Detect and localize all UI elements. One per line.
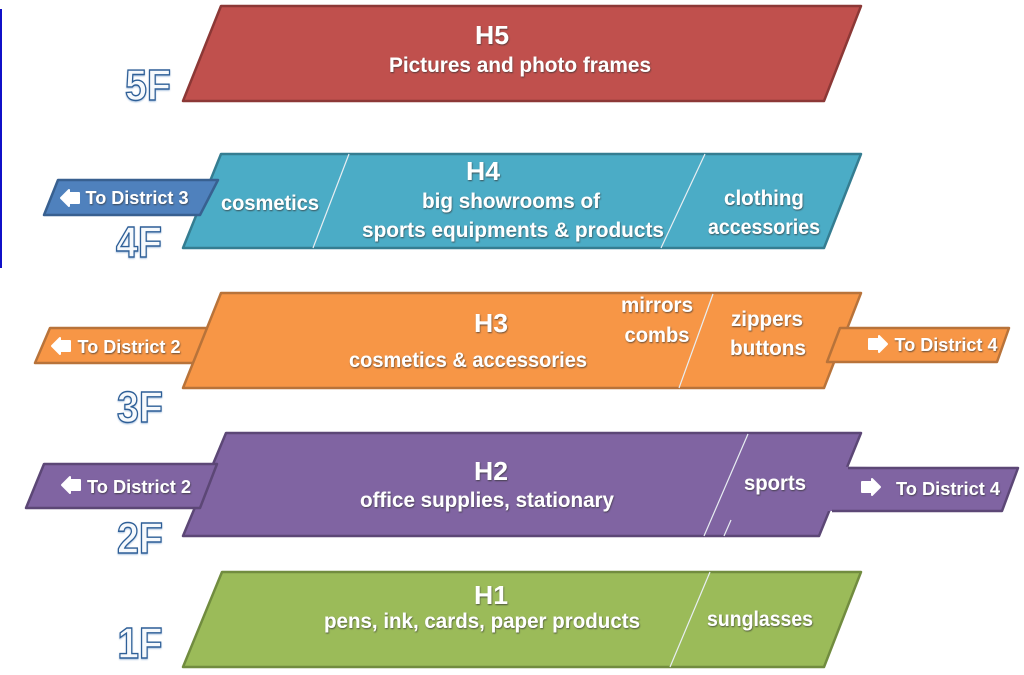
heading: H1: H1 <box>474 580 508 610</box>
divider <box>679 294 713 388</box>
text: cosmetics: cosmetics <box>221 192 319 215</box>
shape: tab 4 purple fill <box>827 467 1018 511</box>
heading: H4: H4 <box>466 156 501 186</box>
tab: To District 2 (2F) <box>26 464 217 508</box>
text: zippers: zippers <box>731 308 803 331</box>
shape: tab 4 orange <box>827 328 1009 362</box>
text: To District 3: To District 3 <box>86 188 188 208</box>
text: To District 4: To District 4 <box>894 335 998 355</box>
floor label: 1F: 1F <box>118 619 162 668</box>
text: buttons: buttons <box>730 337 806 360</box>
text: To District 2: To District 2 <box>87 477 191 497</box>
divider long <box>704 434 748 536</box>
panel: 4F H4 <box>183 154 861 248</box>
text: mirrors: mirrors <box>621 294 693 317</box>
shape: H3 band <box>183 293 861 388</box>
floor label: 5F: 5F <box>125 61 171 110</box>
heading: H3: H3 <box>474 308 508 338</box>
text: Pictures and photo frames: Pictures and photo frames <box>389 54 651 77</box>
text: pens, ink, cards, paper products: pens, ink, cards, paper products <box>324 610 640 633</box>
text: combs: combs <box>624 324 690 347</box>
text: big showrooms of: big showrooms of <box>422 190 601 213</box>
tab: To District 3 <box>44 180 218 215</box>
text: cosmetics & accessories: cosmetics & accessories <box>349 349 587 372</box>
floor label: 3F: 3F <box>117 383 163 432</box>
icon: right arrow <box>862 479 880 495</box>
heading: H5: H5 <box>475 20 509 50</box>
panel: 3F H3 <box>183 293 861 388</box>
text: sports equipments & products: sports equipments & products <box>362 219 664 242</box>
icon: right arrow <box>869 336 887 352</box>
tab: To District 4 (3F) <box>827 328 1009 362</box>
shape: H1 band <box>183 572 861 667</box>
tab: To District 4 (2F) <box>827 467 1018 511</box>
panel: 5F H5 <box>183 6 861 101</box>
divider left <box>313 154 349 248</box>
shape: tab 2 orange <box>35 328 215 363</box>
panel: 2F H2 <box>183 433 861 536</box>
text: To District 2: To District 2 <box>78 337 180 357</box>
shape: tab 3 <box>44 180 218 215</box>
icon: left arrow <box>61 190 79 206</box>
tab: To District 2 (3F) <box>35 328 215 363</box>
divider right <box>661 154 705 248</box>
icon: left arrow <box>52 338 70 354</box>
shape: H4 band <box>183 154 861 248</box>
text: To District 4: To District 4 <box>896 479 1000 499</box>
divider <box>670 572 710 667</box>
divider short <box>724 520 731 536</box>
text: clothing: clothing <box>724 187 804 210</box>
shape: H2 band <box>183 433 861 536</box>
shape: tab 4 purple outline <box>832 468 1018 511</box>
icon: left arrow <box>62 477 80 493</box>
floor label: 2F: 2F <box>117 514 163 563</box>
blue vertical line <box>0 9 2 268</box>
text: sunglasses: sunglasses <box>707 608 813 631</box>
heading: H2: H2 <box>474 456 508 486</box>
text: office supplies, stationary: office supplies, stationary <box>360 489 614 512</box>
shape: tab 2 purple <box>26 464 217 508</box>
text: sports: sports <box>744 472 806 495</box>
panel: 1F H1 <box>183 572 861 667</box>
floor label: 4F: 4F <box>116 218 162 267</box>
text: accessories: accessories <box>708 216 820 239</box>
shape: H5 band <box>183 6 861 101</box>
